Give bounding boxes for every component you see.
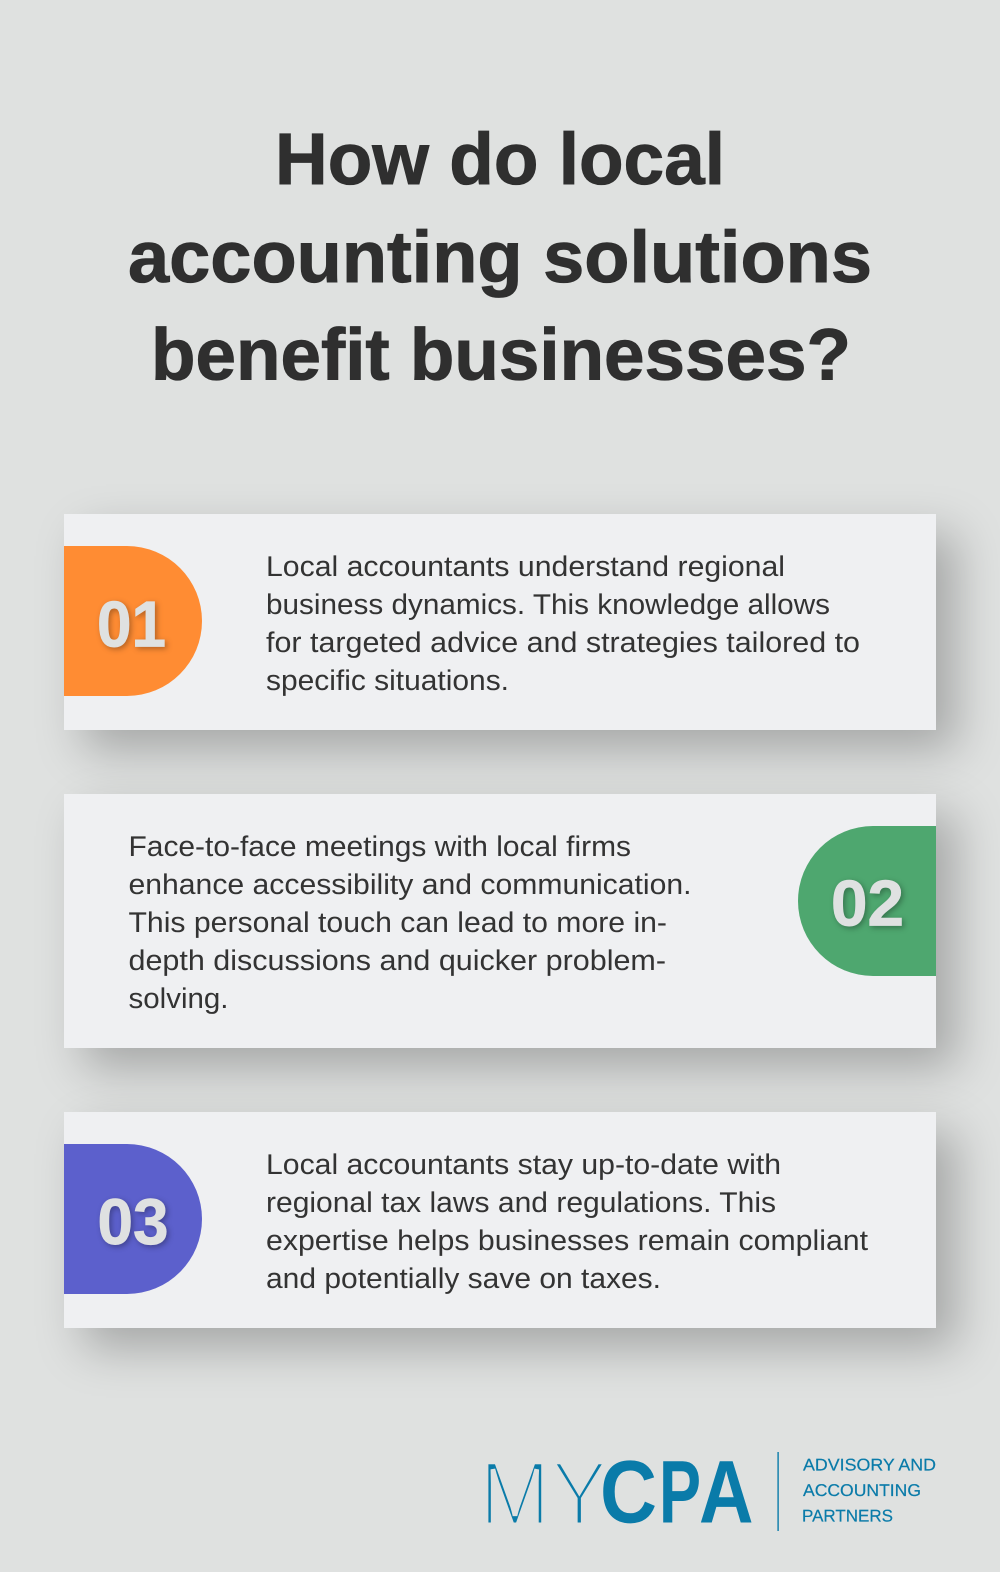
icon: orange number badge 01: 01 — [97, 588, 166, 660]
title: How do local — [275, 119, 725, 200]
text block: card 03 description — [266, 1149, 868, 1295]
logo wordmark: CPA: A — [699, 1442, 754, 1542]
text block: card 02 description: depth discussions and quicker problem- — [128, 945, 666, 977]
title: benefit businesses? — [151, 314, 851, 396]
text block: card 01 description: business dynamics. This knowledge allows — [266, 589, 830, 621]
text block: card 03 description: Local accountants stay up-to-date with — [266, 1149, 781, 1181]
panel: card 01 — [64, 514, 936, 730]
logo wordmark: MY: MY — [479, 1443, 608, 1545]
text block: card 02 description: Face-to-face meetings with local firms — [128, 831, 631, 863]
text block: card 03 description: expertise helps businesses remain compliant — [266, 1225, 868, 1257]
title — [128, 119, 872, 396]
text block: card 02 description: solving. — [128, 983, 228, 1015]
logo tagline — [802, 1456, 936, 1526]
text block: card 01 description: specific situations. — [266, 665, 509, 697]
text block: card 02 description — [128, 831, 692, 1015]
text block: card 03 description: regional tax laws and regulations. This — [266, 1187, 776, 1219]
logo tagline: ACCOUNTING — [803, 1481, 921, 1500]
logo tagline: PARTNERS — [802, 1506, 893, 1526]
panel: card 02 — [64, 794, 936, 1048]
logo wordmark: CPA — [600, 1442, 754, 1542]
icon: green number badge 02: 02 — [831, 866, 904, 940]
icon: orange number badge 01 — [64, 546, 202, 696]
text block: card 01 description — [266, 551, 860, 697]
text block: card 01 description: Local accountants understand regional — [266, 551, 785, 583]
text block: card 02 description: This personal touch can lead to more in- — [128, 907, 667, 939]
title: accounting solutions — [128, 217, 872, 298]
text block: card 01 description: for targeted advice and strategies tailored to — [266, 627, 860, 659]
text block: card 02 description: enhance accessibility and communication. — [128, 869, 692, 901]
icon: purple number badge 03: 03 — [98, 1185, 168, 1258]
text block: card 03 description: and potentially save on taxes. — [266, 1263, 661, 1295]
logo wordmark: CPA: C — [600, 1442, 657, 1542]
icon: green number badge 02 — [798, 826, 936, 976]
logo tagline: ADVISORY AND — [803, 1456, 936, 1474]
panel: card 03 — [64, 1112, 936, 1328]
icon: purple number badge 03 — [64, 1144, 202, 1294]
logo wordmark: CPA: P — [659, 1442, 701, 1542]
logo divider — [777, 1452, 779, 1531]
